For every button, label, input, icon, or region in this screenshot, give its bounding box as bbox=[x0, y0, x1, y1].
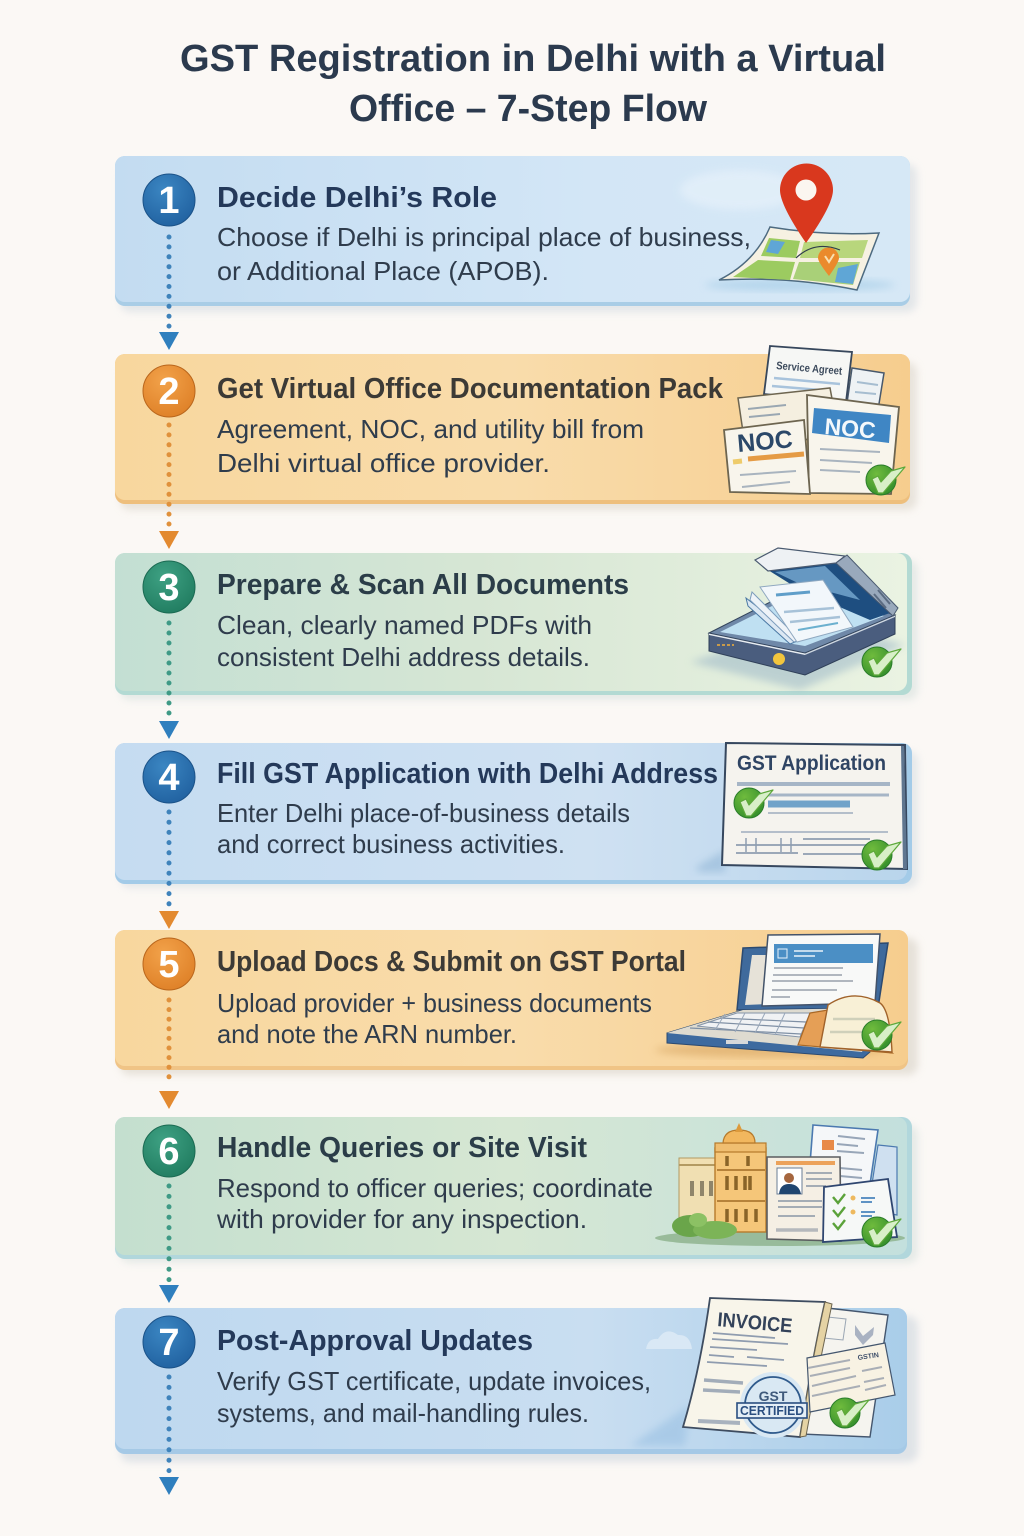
connector: step 7 final arrow bbox=[159, 1377, 179, 1495]
step 3 heading: Prepare & Scan All Documents bbox=[217, 569, 629, 601]
step 1 description bbox=[217, 222, 751, 286]
step 3 description: Clean, clearly named PDFs with bbox=[217, 610, 592, 640]
icon: invoice, letters and GST certified stamp: GSTIN bbox=[857, 1352, 879, 1362]
icon: invoice, letters and GST certified stamp bbox=[646, 1298, 895, 1438]
step 1 description: Choose if Delhi is principal place of business, bbox=[217, 222, 751, 252]
icon: NOC document stack: NOC bbox=[824, 413, 877, 443]
panel: step 6 bbox=[115, 1117, 918, 1303]
step 3 description: consistent Delhi address details. bbox=[217, 642, 590, 672]
step 2 number badge: 2 bbox=[158, 371, 180, 413]
step 7 description: Verify GST certificate, update invoices, bbox=[217, 1366, 651, 1396]
icon: invoice, letters and GST certified stamp: CERTIFIED bbox=[740, 1404, 804, 1418]
step 1 number badge: 1 bbox=[158, 180, 180, 222]
step 6 heading: Handle Queries or Site Visit bbox=[217, 1132, 587, 1164]
connector: step 5 to 6 bbox=[159, 1000, 179, 1109]
step 7 heading: Post-Approval Updates bbox=[217, 1325, 533, 1357]
step 2 description bbox=[217, 414, 644, 478]
step 4 description bbox=[217, 798, 630, 859]
step 5 number badge bbox=[143, 938, 195, 990]
step 3 number badge bbox=[143, 561, 195, 613]
step 4 description: Enter Delhi place-of-business details bbox=[217, 798, 630, 828]
step 7 description: systems, and mail-handling rules. bbox=[217, 1398, 589, 1428]
step 5 number badge: 5 bbox=[158, 944, 180, 986]
title bbox=[180, 38, 886, 130]
panel: step 7 bbox=[115, 1298, 918, 1495]
step 1 description: or Additional Place (APOB). bbox=[217, 256, 549, 286]
icon: map with location pin bbox=[705, 164, 895, 291]
step 1 heading: Decide Delhi’s Role bbox=[217, 182, 497, 214]
step 5 heading: Upload Docs & Submit on GST Portal bbox=[217, 946, 686, 978]
icon: laptop with documents folder bbox=[655, 934, 901, 1058]
step 7 description bbox=[217, 1366, 651, 1428]
step 6 number badge: 6 bbox=[158, 1131, 180, 1173]
connector: step 2 to 3 bbox=[159, 425, 179, 549]
step 6 number badge bbox=[143, 1125, 195, 1177]
step 7 number badge bbox=[143, 1316, 195, 1368]
step 3 description bbox=[217, 610, 592, 672]
icon: NOC document stack bbox=[724, 346, 905, 495]
step 2 heading: Get Virtual Office Documentation Pack bbox=[217, 373, 724, 405]
icon: NOC document stack: Service Agreet bbox=[776, 360, 843, 378]
connector: step 3 to 4 bbox=[159, 623, 179, 739]
icon: GST application form bbox=[695, 743, 907, 872]
step 6 description: with provider for any inspection. bbox=[216, 1204, 587, 1234]
panel: step 1 bbox=[115, 156, 917, 350]
title: GST Registration in Delhi with a Virtual bbox=[180, 38, 886, 80]
connector: step 6 to 7 bbox=[159, 1186, 179, 1303]
step 2 description: Delhi virtual office provider. bbox=[217, 448, 550, 478]
connector: step 1 to 2 bbox=[159, 237, 179, 350]
step 4 number badge: 4 bbox=[158, 757, 180, 799]
step 5 description bbox=[217, 988, 652, 1049]
panel: step 2 bbox=[115, 346, 917, 549]
step 6 description bbox=[216, 1173, 653, 1234]
step 4 heading: Fill GST Application with Delhi Address bbox=[217, 758, 718, 790]
connector: step 4 to 5 bbox=[159, 812, 179, 929]
title: Office – 7-Step Flow bbox=[349, 88, 707, 130]
panel: step 4 bbox=[115, 743, 918, 929]
step 4 number badge bbox=[143, 751, 195, 803]
icon: invoice, letters and GST certified stamp: INVOICE bbox=[717, 1309, 793, 1338]
step 1 number badge bbox=[143, 174, 195, 226]
panel: step 3 bbox=[115, 548, 918, 739]
icon: GST application form: GST Application bbox=[737, 752, 886, 775]
step 2 description: Agreement, NOC, and utility bill from bbox=[217, 414, 644, 444]
step 5 description: Upload provider + business documents bbox=[217, 988, 652, 1018]
step 7 number badge: 7 bbox=[158, 1322, 180, 1364]
step 5 description: and note the ARN number. bbox=[217, 1019, 517, 1049]
step 3 number badge: 3 bbox=[158, 567, 180, 609]
step 4 description: and correct business activities. bbox=[217, 829, 565, 859]
icon: scanner with documents bbox=[690, 548, 905, 690]
icon: invoice, letters and GST certified stamp: GST bbox=[759, 1388, 788, 1404]
step 2 number badge bbox=[143, 365, 195, 417]
icon: government building and documents bbox=[655, 1123, 905, 1247]
step 6 description: Respond to officer queries; coordinate bbox=[217, 1173, 653, 1203]
panel: step 5 bbox=[115, 930, 918, 1109]
icon: NOC document stack: NOC bbox=[736, 425, 794, 458]
